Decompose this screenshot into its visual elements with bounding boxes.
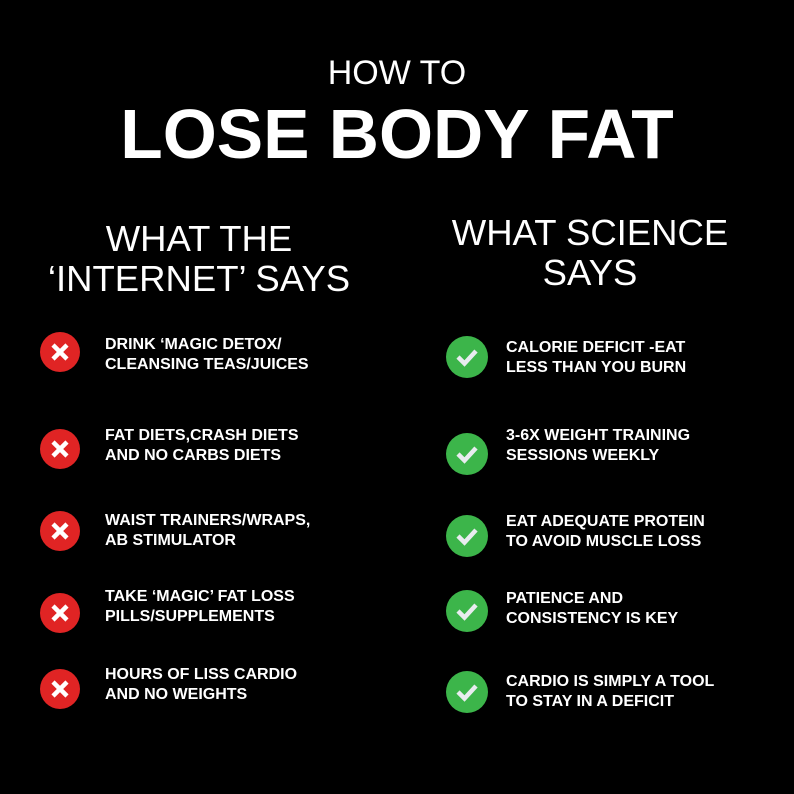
panel: science list: LESS THAN YOU BURN bbox=[506, 358, 686, 376]
heading: internet: ‘INTERNET’ SAYS bbox=[48, 258, 350, 299]
panel: internet list: TAKE ‘MAGIC’ FAT LOSS bbox=[105, 588, 295, 605]
panel: internet list: AND NO WEIGHTS bbox=[105, 686, 247, 702]
item 3 bbox=[40, 511, 310, 551]
panel: science list bbox=[446, 336, 714, 713]
panel: science list: 3-6X WEIGHT TRAINING bbox=[506, 427, 690, 444]
heading: science: SAYS bbox=[543, 252, 637, 293]
item 4 bbox=[40, 588, 295, 633]
panel: internet list: FAT DIETS,CRASH DIETS bbox=[105, 427, 298, 444]
panel: science list: PATIENCE AND bbox=[506, 590, 623, 607]
item 4 bbox=[446, 590, 678, 632]
panel: internet list: HOURS OF LISS CARDIO bbox=[105, 666, 297, 683]
panel: science list: CARDIO IS SIMPLY A TOOL bbox=[506, 673, 714, 690]
title: HOW TO bbox=[328, 54, 466, 92]
panel: internet list: AND NO CARBS DIETS bbox=[105, 446, 281, 464]
panel: internet list bbox=[40, 332, 310, 709]
panel: internet list: WAIST TRAINERS/WRAPS, bbox=[105, 512, 310, 529]
title bbox=[120, 54, 674, 173]
panel: internet list: PILLS/SUPPLEMENTS bbox=[105, 608, 275, 624]
panel: science list: EAT ADEQUATE PROTEIN bbox=[506, 513, 705, 530]
heading: science bbox=[452, 212, 728, 293]
item 5 bbox=[40, 666, 297, 709]
panel: internet list: CLEANSING TEAS/JUICES bbox=[105, 356, 309, 372]
panel: internet list: AB STIMULATOR bbox=[105, 532, 236, 548]
panel: science list: SESSIONS WEEKLY bbox=[506, 446, 659, 464]
panel: internet list: DRINK ‘MAGIC DETOX/ bbox=[105, 336, 282, 353]
heading: internet bbox=[48, 218, 350, 299]
item 3 bbox=[446, 513, 705, 557]
panel: science list: CALORIE DEFICIT -EAT bbox=[506, 339, 685, 356]
item 2 bbox=[446, 427, 690, 475]
heading: internet: WHAT THE bbox=[106, 218, 292, 259]
item 2 bbox=[40, 427, 298, 469]
panel: science list: CONSISTENCY IS KEY bbox=[506, 610, 678, 626]
item 1 bbox=[40, 332, 309, 372]
item 5 bbox=[446, 671, 714, 713]
title: LOSE BODY FAT bbox=[120, 95, 674, 173]
panel: science list: TO STAY IN A DEFICIT bbox=[506, 692, 674, 710]
panel: science list: TO AVOID MUSCLE LOSS bbox=[506, 532, 701, 550]
item 1 bbox=[446, 336, 686, 378]
heading: science: WHAT SCIENCE bbox=[452, 212, 728, 253]
